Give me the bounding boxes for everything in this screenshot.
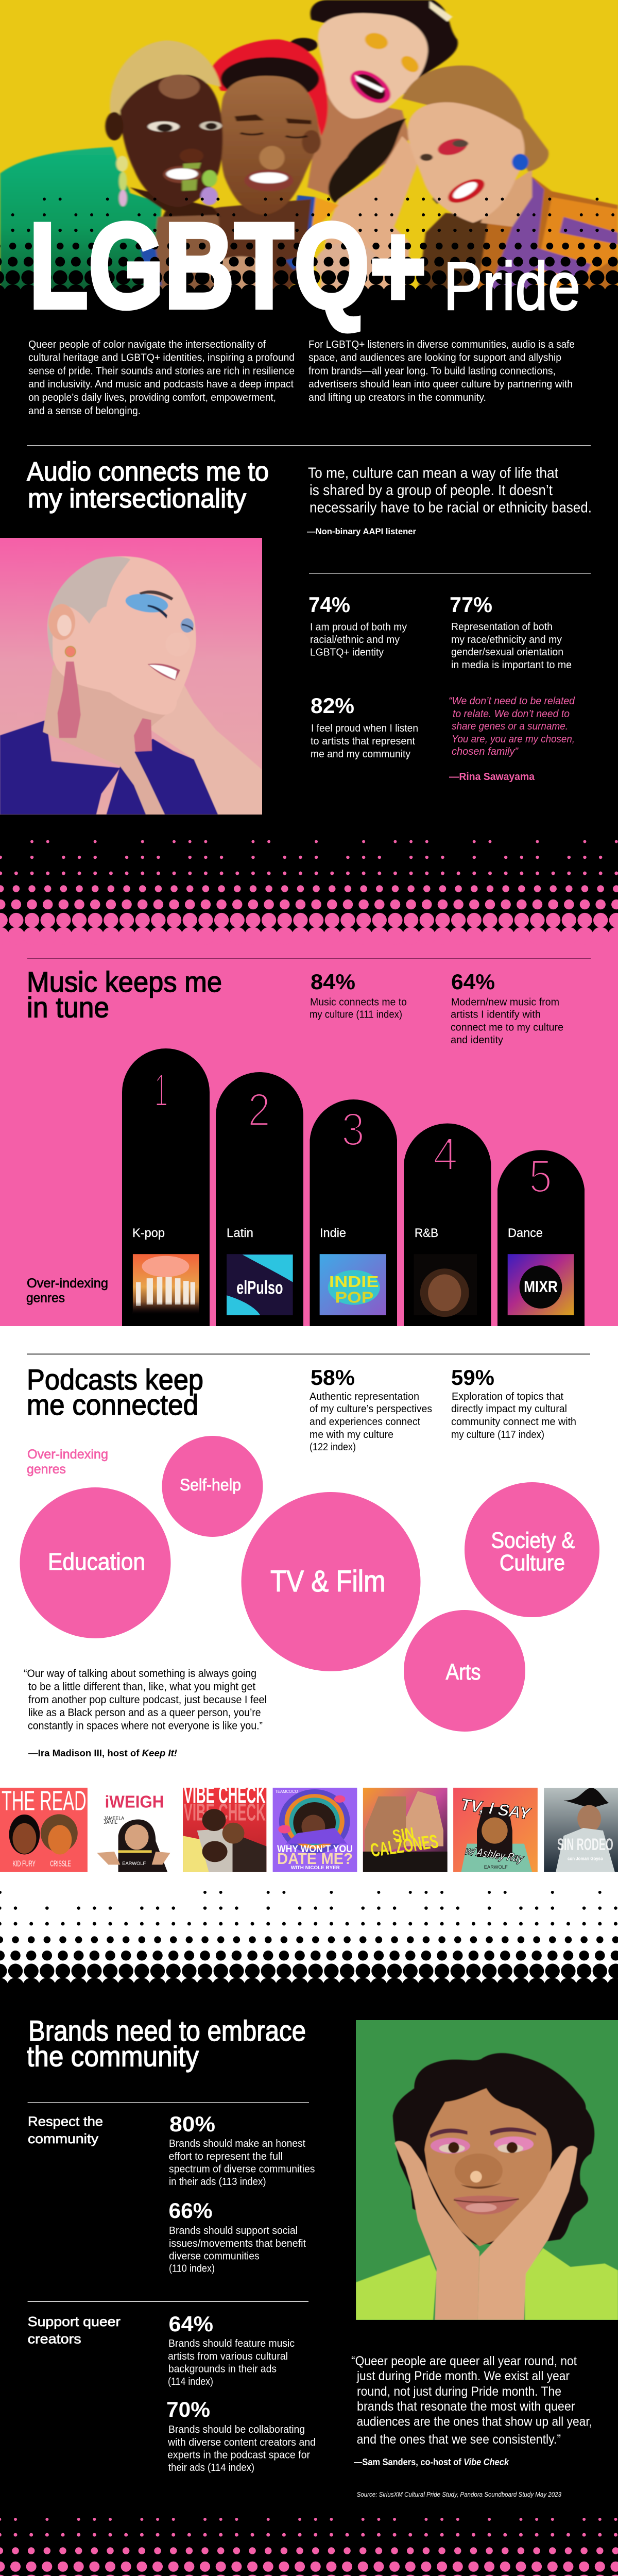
album: elPulso: elPulso [236,1278,283,1298]
heading: brands [27,2014,306,2073]
stat 64%: 64% [451,970,495,994]
heading: music: in tune [27,991,109,1023]
intro left paragraph: Queer people of color navigate the intersectionality of [28,338,266,350]
label: respect the community: community [28,2131,98,2146]
label: support queer creators: creators [28,2331,81,2346]
stat 58%: Authentic representation [310,1391,419,1402]
intro left paragraph: and a sense of belonging. [28,405,141,417]
stat 70%: their ads (114 index) [168,2462,254,2473]
divider [27,445,591,446]
divider: music [27,958,591,959]
bubble: arts: Arts [446,1659,481,1685]
stat 77%: 77% [450,592,492,617]
stat 58% [310,1365,432,1453]
quote: Ira Madison III: —Ira Madison III, host of Keep It! [28,1748,177,1758]
arch 2: Latin [216,1072,303,1326]
stat 59%: Exploration of topics that [452,1391,563,1402]
over-indexing label: Over-indexing [27,1276,108,1291]
over-indexing label: genres [26,1291,65,1306]
quote: Sam Sanders: round, not just during Pride month. The [357,2384,561,2399]
heading: podcasts: Podcasts keep [27,1363,203,1396]
label: support queer creators [28,2314,121,2346]
heading: audio: Audio connects me to [27,457,269,487]
cover: Why Won't You Date Me: TEAMCOCO [275,1790,298,1794]
stat 84%: Music connects me to [310,996,407,1008]
stat 82%: I feel proud when I listen [311,723,418,734]
bubble: society & culture [465,1482,599,1617]
title: LGBTQ+ [29,198,426,334]
stat 82%: to artists that represent [311,736,415,747]
stat 74%: LGBTQ+ identity [310,647,384,658]
stat 58%: me with my culture [310,1429,393,1440]
quote: Sam Sanders: just during Pride month. We exist all year [356,2369,570,2383]
over-indexing label pink [27,1447,108,1477]
cover: Vibe Check [183,1781,266,1872]
bubble: education [20,1487,171,1638]
stat 77%: in media is important to me [451,659,572,671]
stat 58%: (122 index) [310,1442,356,1453]
stat 70%: experts in the podcast space for [167,2449,310,2461]
podcast covers: VIBE CHECK [184,1799,266,1826]
label: support queer creators: Support queer [28,2314,121,2329]
listener quote [307,465,592,536]
intro right paragraph: advertisers should lean into queer culture by partnering with [308,378,573,390]
bubble: self-help: Self-help [180,1476,241,1494]
bubble: self-help [162,1436,263,1537]
stat 64% [451,970,563,1046]
arch 1: K-pop: K-pop [132,1226,165,1240]
label: respect the community: Respect the [28,2113,103,2129]
arch 1: K-pop [122,1048,210,1326]
quote: Sam Sanders [351,2354,592,2467]
heading: podcasts [27,1363,203,1421]
pink quote: Rina Sawayama: You are, you are my chosen, [452,734,575,745]
stat 59% [451,1365,576,1440]
stat 64% brands: artists from various cultural [168,2351,288,2362]
divider: brands [28,2102,309,2103]
quote: Sam Sanders: “Queer people are queer all year round, not [351,2354,577,2368]
intro left paragraph: and inclusivity. And music and podcasts have a deep impact [28,378,294,390]
stat 64% brands: (114 index) [168,2376,213,2387]
cover: Why Won't You Date Me: WHY WON’T YOU [277,1843,353,1855]
stat 80%: spectrum of diverse communities [169,2163,315,2175]
intro left paragraph: on people’s daily lives, providing comfort, empowerment, [28,392,276,403]
hero section [0,0,618,334]
stat 66% [169,2198,306,2274]
heading: audio [27,457,269,514]
cover: Sin Calzones: CALZONES [367,1831,441,1861]
divider: support [28,2301,308,2302]
stat 80%: effort to represent the full [169,2151,283,2162]
pink quote: Rina Sawayama: chosen family” [452,746,519,757]
white section background [0,1326,618,1987]
heading: brands: the community [27,2040,199,2073]
stat 82%: me and my community [311,749,410,760]
halftone transition: black to pink [1,842,618,936]
cover: TV, I Say: EARWOLF [484,1865,508,1870]
album: MIXR [508,1254,574,1315]
quote: Sam Sanders: and the ones that we see consistently.” [357,2432,561,2447]
bubble: education: Education [48,1548,145,1575]
heading: music: Music keeps me [27,965,222,998]
stat 66%: (110 index) [169,2263,215,2274]
bubble: society & culture: Society & [491,1528,575,1553]
cover: iWeigh: JAMEELA [104,1815,124,1821]
album: Indie Pop: INDIE [329,1273,379,1291]
cover: Sin Calzones: SIN [390,1824,417,1844]
cover: TV, I Say: w/ Ashley Ray [464,1844,526,1865]
over-indexing label pink: genres [27,1462,66,1477]
stat 66%: issues/movements that benefit [169,2238,306,2249]
pink section background [0,936,618,1326]
quote: Ira Madison III: to be a little different than, like, what you might get [28,1681,255,1693]
podcast covers [0,1781,618,1872]
photo: smiling person with blue eyeshadow [0,538,262,815]
arch 4: R&B: R&B [415,1226,438,1240]
podcast covers: THE READ [2,1785,87,1816]
stat 70%: Brands should be collaborating [168,2424,305,2435]
pink quote: Rina Sawayama: “We don’t need to be related [449,696,575,707]
arch 2: Latin: Latin [227,1226,253,1240]
hero photo: four friends on yellow [0,0,618,296]
arch 3: Indie: 3 [341,1104,365,1156]
stat 84%: my culture (111 index) [310,1009,402,1020]
intro left paragraph: cultural heritage and LGBTQ+ identities, inspiring a profound [28,351,295,364]
halftone transition: black to pink footer [0,2519,618,2576]
stat 64% brands: 64% [169,2312,213,2336]
cover: The Read [0,1785,88,1872]
stat 58%: 58% [311,1365,355,1389]
bubble: TV & film: TV & Film [270,1565,385,1598]
intro right paragraph: space, and audiences are looking for support and allyship [308,351,561,364]
album: MIXR: MIXR [524,1277,558,1296]
quote: Sam Sanders: brands that resonate the most with queer [357,2399,575,2414]
quote: Ira Madison III: from another pop culture podcast, just because I feel [28,1694,267,1706]
album: K-pop [133,1254,199,1314]
stat 80% [169,2112,315,2188]
stat 82% [311,693,418,760]
cover: TV, I Say: TV, I SAY [458,1795,533,1823]
cover: iWeigh: EARWOLF [122,1861,146,1866]
bubble: TV & film [241,1492,420,1671]
heading: audio: my intersectionality [28,484,246,514]
quote: Sam Sanders: audiences are the ones that show up all year, [357,2415,592,2429]
stat 64%: and identity [451,1035,503,1046]
arch 1: K-pop: 1 [154,1065,168,1116]
stat 77%: gender/sexual orientation [451,647,563,658]
stat 77% [450,592,572,671]
stat 58%: and experiences connect [310,1416,420,1428]
stat 59%: 59% [451,1365,494,1389]
podcast covers: VIBE CHECK [184,1781,266,1808]
source note: Source: SiriusXM Cultural Pride Study, Pandora Soundboard Study May 2023 [357,2490,562,2498]
intro right paragraph [308,338,575,403]
stat 64% brands: Brands should feature music [168,2338,295,2349]
arch 2: Latin: 2 [248,1084,270,1136]
halftone transition: white to black [0,1891,618,1987]
stat 64% brands: backgrounds in their ads [168,2364,277,2375]
intro right paragraph: and lifting up creators in the community. [308,392,486,403]
stat 64% brands [168,2312,295,2387]
cover: iWeigh: JAMIL [104,1819,117,1825]
cover: Why Won't You Date Me: WITH NICOLE BYER [291,1865,340,1870]
intro left paragraph: sense of pride. Their sounds and stories are rich in resilience [28,365,295,377]
pink quote: Rina Sawayama: share genes or a surname. [452,721,568,732]
arch 5: Dance [497,1150,585,1326]
stat 70% [166,2397,316,2473]
heading: music [27,965,222,1023]
cover: iWeigh: iWEIGH [105,1792,164,1812]
stat 74% [308,592,407,658]
stat 66%: Brands should support social [169,2225,298,2236]
stat 80%: 80% [169,2112,215,2136]
bubble: arts [404,1610,525,1732]
listener quote: To me, culture can mean a way of life that [308,465,558,481]
stat 59%: community connect me with [451,1416,576,1428]
stat 74%: I am proud of both my [310,621,407,633]
stat 59%: directly impact my cultural [451,1403,567,1415]
over-indexing label [26,1276,108,1306]
stat 82%: 82% [311,693,354,718]
cover: Why Won't You Date Me: DATE ME? [277,1850,353,1868]
intro right paragraph: from brands—all year long. To build lasting connections, [308,365,556,377]
hero halftone dots [0,199,618,293]
stat 64%: Modern/new music from [451,996,559,1008]
stat 59%: my culture (117 index) [451,1429,544,1440]
label: respect the community [28,2113,103,2146]
title: Pride [443,248,580,324]
listener quote: necessarily have to be racial or ethnicity based. [310,500,592,516]
cover: Sin Rodeo [544,1788,618,1872]
over-indexing label pink: Over-indexing [27,1447,108,1462]
quote: Ira Madison III: constantly in spaces where not everyone is like you.” [28,1720,263,1732]
cover: Why Won't You Date Me [273,1788,357,1872]
arch 3: Indie [310,1099,397,1326]
album: R&B portrait [414,1254,477,1317]
stat 70%: with diverse content creators and [167,2437,316,2448]
cover: Sin Calzones [363,1788,448,1872]
album: Indie Pop: POP [335,1289,374,1307]
heading: brands: Brands need to embrace [28,2014,306,2047]
stat 77%: my race/ethnicity and my [451,634,562,646]
intro left paragraph [28,338,295,417]
quote: Ira Madison III: like as a Black person and as a queer person, you’re [28,1707,261,1719]
listener quote: is shared by a group of people. It doesn’t [310,482,553,499]
quote: Sam Sanders: —Sam Sanders, co-host of Vibe Check [354,2457,509,2467]
stat 66%: diverse communities [169,2250,260,2262]
divider: stats [309,573,591,574]
stat 77%: Representation of both [451,621,553,633]
arch 4: R&B [404,1124,491,1326]
stat 64%: connect me to my culture [451,1022,563,1033]
stat 80%: Brands should make an honest [169,2138,305,2149]
quote: Ira Madison III: “Our way of talking about something is always going [24,1668,256,1680]
stat 66%: 66% [169,2198,212,2223]
pink quote: Rina Sawayama: to relate. We don’t need to [453,708,570,720]
album: Indie Pop [320,1254,386,1315]
arch 4: R&B: 4 [433,1129,458,1180]
bubble: society & culture: Culture [500,1550,565,1575]
pink quote: Rina Sawayama: —Rina Sawayama [449,771,535,783]
quote: Ira Madison III [24,1668,267,1758]
listener quote: —Non-binary AAPI listener [307,527,416,536]
cover: TV, I Say [453,1788,538,1872]
cover: iWeigh [97,1792,170,1872]
arch 3: Indie: Indie [320,1226,346,1240]
stat 80%: in their ads (113 index) [169,2176,266,2188]
heading: podcasts: me connected [27,1388,198,1421]
stat 74%: 74% [308,592,350,617]
album: elPulso [227,1254,293,1315]
stat 64%: artists I identify with [451,1009,541,1020]
pink quote: Rina Sawayama [449,696,575,783]
intro right paragraph: For LGBTQ+ listeners in diverse communities, audio is a safe [308,338,575,350]
photo: person with curly hair on green [356,2020,618,2320]
album art row [133,1254,574,1317]
cover: The Read: KID FURY [12,1859,36,1868]
arch 5: Dance: 5 [529,1151,552,1202]
stat 70%: 70% [166,2397,210,2421]
stat 74%: racial/ethnic and my [310,634,400,646]
arch 5: Dance: Dance [508,1226,543,1240]
stat 84%: 84% [311,970,355,994]
black base under hero [0,293,618,309]
cover: The Read: CRISSLE [50,1859,71,1868]
stat 84% [310,970,407,1020]
stat 58%: of my culture’s perspectives [310,1403,432,1415]
